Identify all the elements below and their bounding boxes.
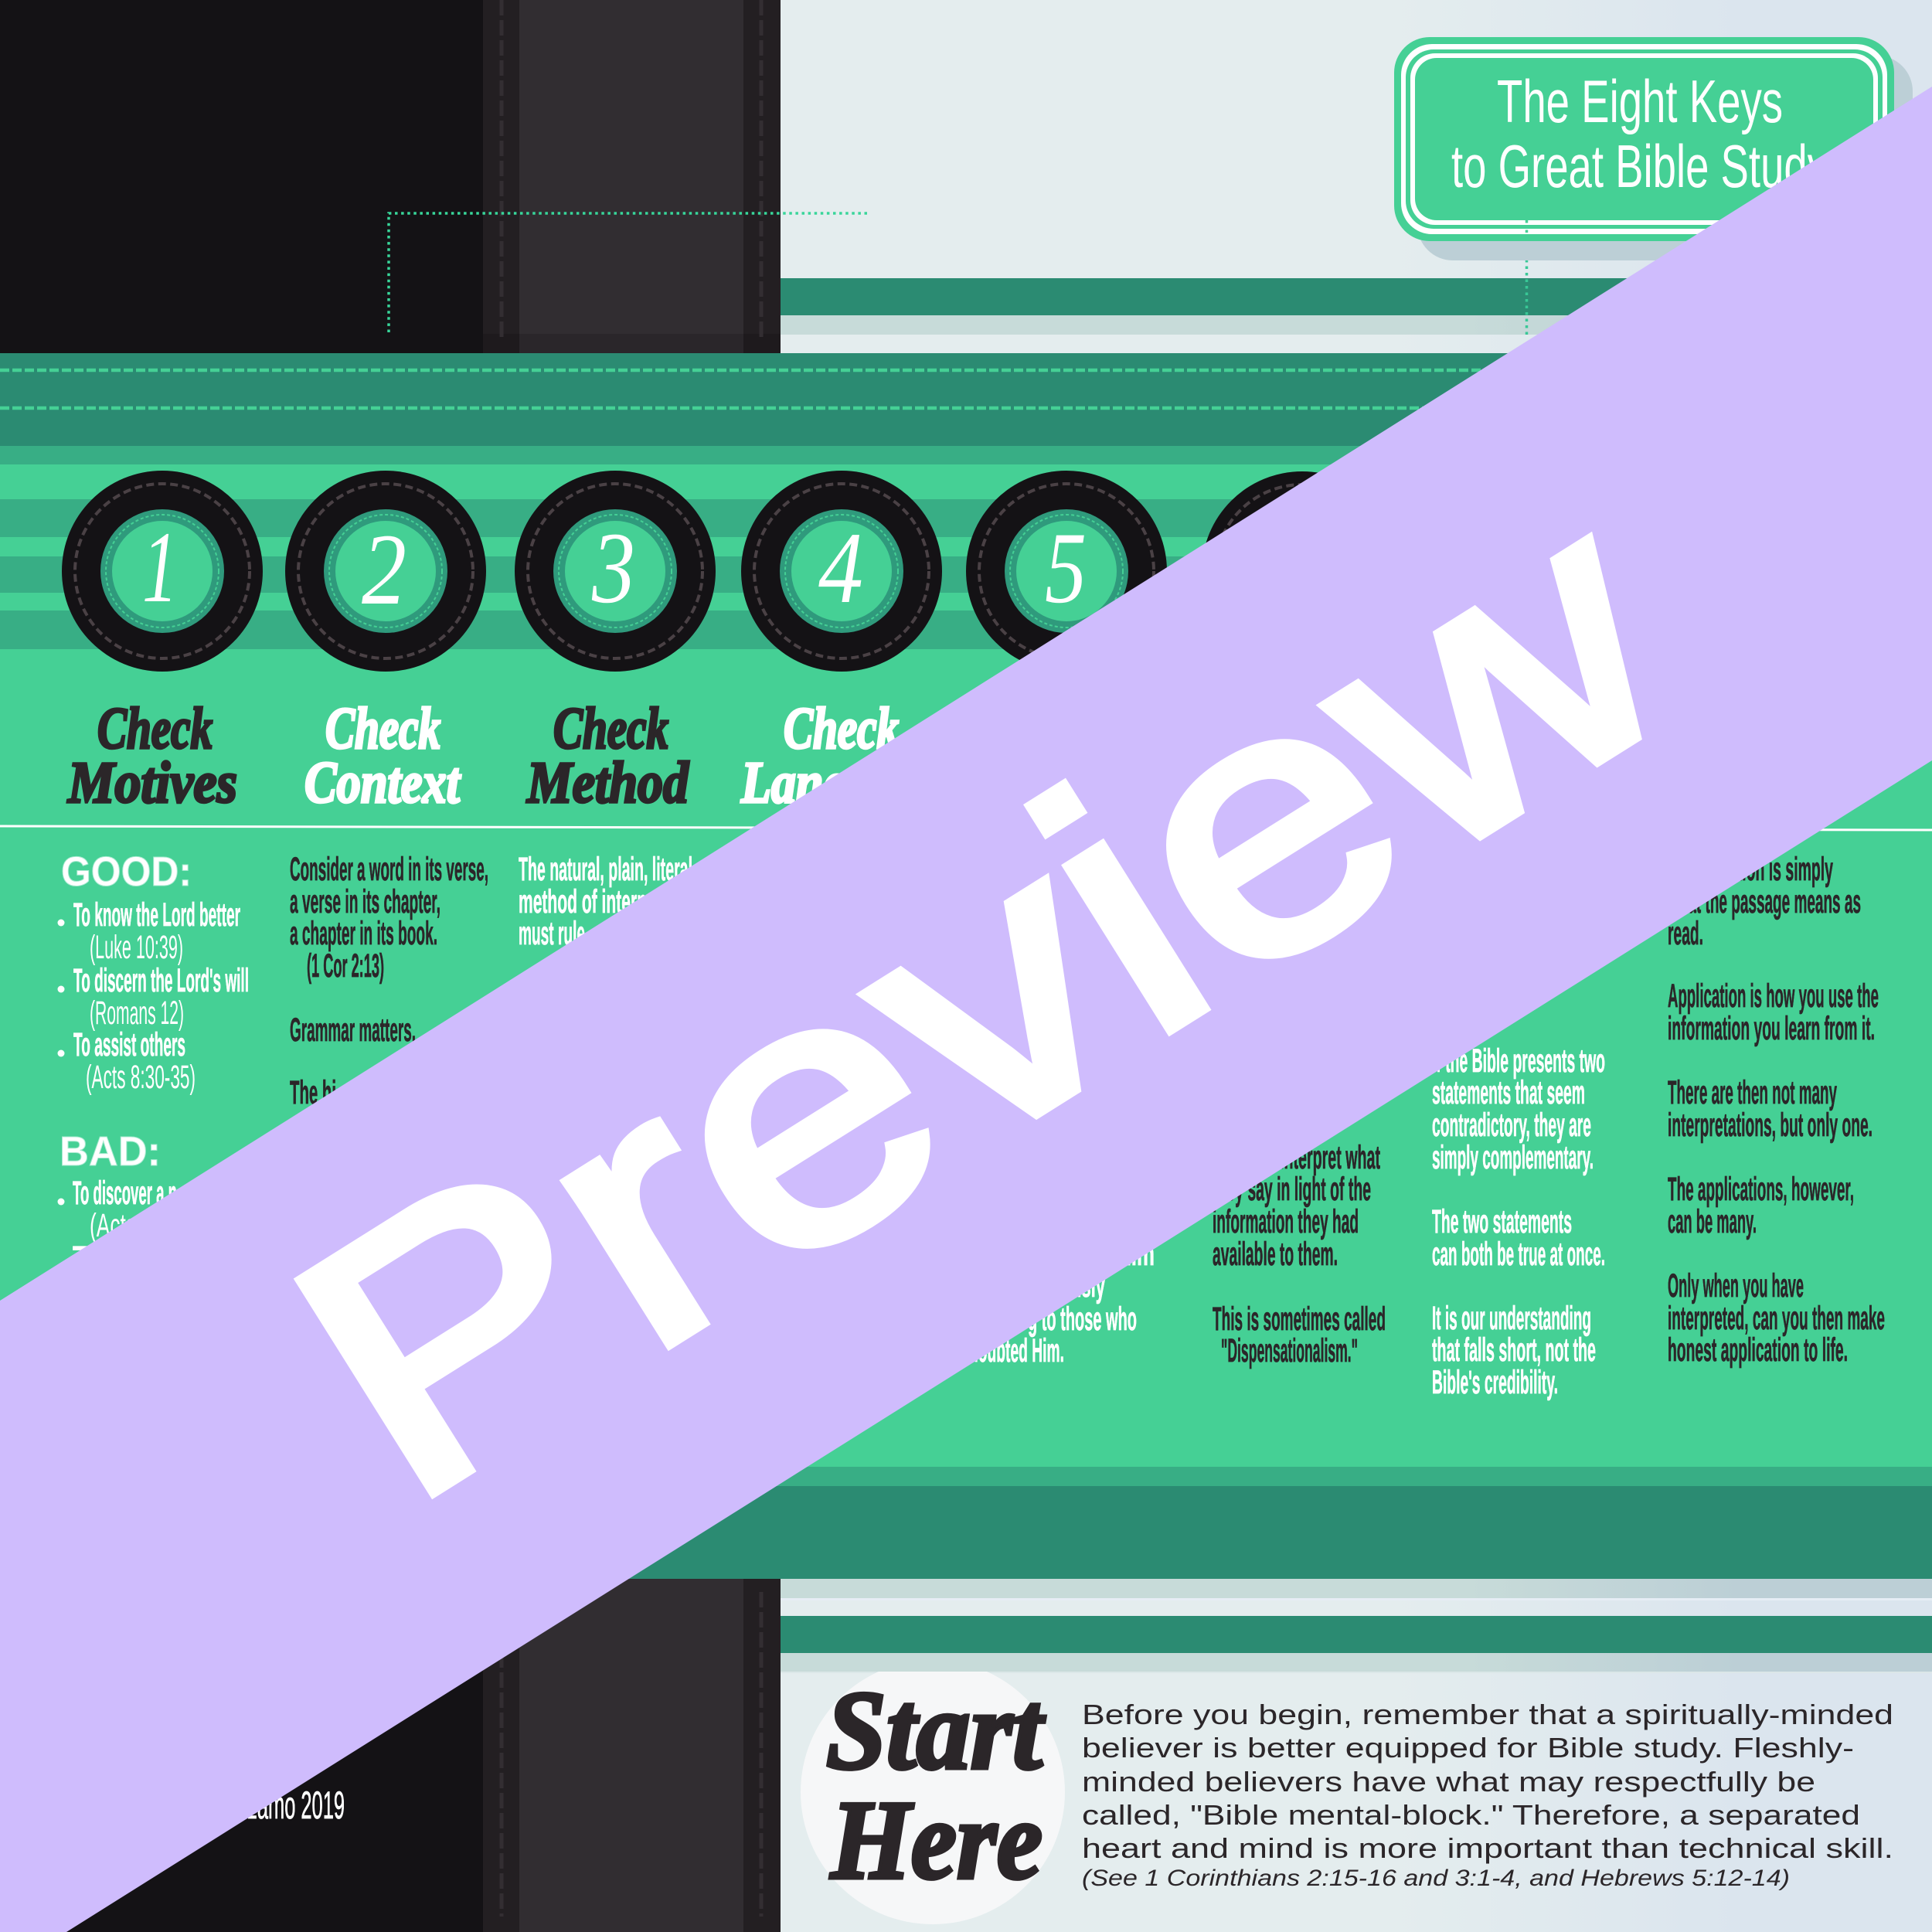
heading: check language: Language bbox=[740, 750, 947, 815]
good list: (Acts 8:30-35) bbox=[86, 1059, 196, 1096]
start here heading: Here bbox=[829, 1777, 1043, 1903]
bad list: T bbox=[73, 1240, 93, 1277]
infographic canvas: that falls short, not the bbox=[1432, 1332, 1596, 1369]
infographic canvas: This is sometimes called bbox=[1213, 1301, 1386, 1338]
start here paragraph: called, "Bible mental-block." Therefore, a separated bbox=[1082, 1799, 1860, 1831]
column 6 text bbox=[1213, 1139, 1386, 1369]
key 5 badge bbox=[966, 471, 1167, 672]
column 7 text: statements that seem bbox=[1432, 1074, 1585, 1111]
column 1: motives bbox=[57, 849, 249, 1277]
label: good: GOOD: bbox=[61, 849, 192, 895]
heading: check motives: Motives bbox=[67, 750, 237, 815]
infographic canvas: If the Bible presents two bbox=[1432, 1043, 1605, 1080]
key 2 badge: 2 bbox=[362, 512, 406, 626]
infographic canvas: interpret what bbox=[1280, 1139, 1380, 1176]
start here paragraph: minded believers have what may respectfully be bbox=[1082, 1766, 1815, 1798]
copyright text: nzamo 2019 bbox=[236, 1784, 345, 1827]
start here paragraph: believer is better equipped for Bible study. Fleshly- bbox=[1082, 1732, 1854, 1764]
column 2: context: a verse in its chapter, bbox=[290, 883, 440, 920]
column 5 fragments: him bbox=[1119, 1236, 1155, 1273]
heading: check method: Method bbox=[526, 750, 689, 815]
heading: check context bbox=[304, 696, 461, 815]
start here paragraph: heart and mind is more important than technical skill. bbox=[1082, 1832, 1893, 1864]
heading: check context: Check bbox=[325, 696, 440, 761]
column 6 text: available to them. bbox=[1213, 1236, 1338, 1273]
column 5 fragments: usly bbox=[1071, 1267, 1105, 1304]
infographic canvas: Consider a word in its verse, bbox=[290, 851, 488, 888]
column 3: method: must rule bbox=[519, 915, 585, 952]
scripture reference: (See 1 Corinthians 2:15-16 and 3:1-4, and Hebrews 5:12-14) bbox=[1082, 1866, 1790, 1891]
key 5 badge: 5 bbox=[1045, 511, 1087, 624]
preview word: Preview bbox=[230, 423, 1734, 1576]
column 7 text: The two statements bbox=[1432, 1203, 1572, 1240]
panel: dark strap bottom bbox=[0, 1579, 781, 1932]
infographic canvas: simply complementary. bbox=[1432, 1139, 1594, 1176]
infographic canvas: To know the Lord better bbox=[73, 896, 240, 934]
start here heading: Start bbox=[826, 1668, 1046, 1793]
column 2: context: Grammar matters. bbox=[290, 1012, 416, 1049]
key 6 badge bbox=[1202, 471, 1403, 672]
infographic canvas: "Dispensationalism." bbox=[1221, 1332, 1358, 1369]
infographic canvas: It is our understanding bbox=[1432, 1300, 1591, 1337]
column 2: context bbox=[290, 851, 488, 1111]
infographic canvas: can both be true at once. bbox=[1432, 1236, 1605, 1273]
start here heading bbox=[826, 1668, 1046, 1903]
heading: check language: Check bbox=[784, 696, 899, 761]
key 3 badge bbox=[515, 471, 716, 672]
good list bbox=[57, 896, 249, 1096]
start here circle bbox=[801, 1660, 1065, 1924]
heading: check method: Check bbox=[553, 696, 668, 761]
key 4 badge bbox=[741, 471, 942, 672]
heading: check method bbox=[526, 696, 689, 815]
bad list: (Acts bbox=[90, 1207, 136, 1244]
column 5 fragments: g to those who bbox=[1028, 1301, 1137, 1338]
column 2: context: (1 Cor 2:13) bbox=[307, 947, 384, 985]
panel: dark strap top bbox=[0, 0, 781, 353]
heading: check motives bbox=[67, 696, 237, 815]
heading: check context: Context bbox=[304, 750, 461, 815]
band over circle bbox=[781, 1616, 1932, 1672]
column 3: method bbox=[519, 851, 692, 952]
key 2 badge bbox=[285, 471, 486, 672]
key 1 badge bbox=[62, 471, 263, 672]
column 8 text bbox=[1668, 851, 1885, 1369]
column 8 text: can be many. bbox=[1668, 1203, 1757, 1240]
infographic canvas: The natural, plain, literal bbox=[519, 851, 692, 888]
title text line 1: The Eight Keys bbox=[1497, 67, 1783, 135]
good list: To assist others bbox=[73, 1026, 185, 1063]
infographic canvas: To discern the Lord's will bbox=[73, 962, 249, 999]
dotted connector: right bbox=[1526, 220, 1528, 335]
dotted connector: left bbox=[389, 213, 869, 332]
bad list bbox=[57, 1175, 177, 1277]
column 5 fragments: doubted Him. bbox=[969, 1332, 1064, 1369]
column 7 text bbox=[1432, 1043, 1605, 1401]
start here paragraph: Before you begin, remember that a spiritually-minded bbox=[1082, 1699, 1893, 1730]
column 6 text: information they had bbox=[1213, 1203, 1359, 1240]
infographic canvas: contradictory, they are bbox=[1432, 1107, 1591, 1144]
panel: green strap bbox=[0, 353, 1932, 1579]
good list: (Romans 12) bbox=[90, 995, 184, 1032]
column 8 text: read. bbox=[1668, 915, 1703, 952]
start here paragraph bbox=[1082, 1699, 1893, 1891]
title box bbox=[1394, 37, 1913, 260]
key 3 badge: 3 bbox=[591, 511, 635, 624]
top right stripes bbox=[781, 278, 1932, 335]
bottom right stripes bbox=[781, 1579, 1932, 1673]
infographic canvas: they say in light of the bbox=[1213, 1171, 1371, 1208]
key 4 badge: 4 bbox=[818, 511, 863, 624]
column 5 fragments bbox=[969, 1236, 1155, 1369]
column 3: method: method of interp bbox=[519, 883, 647, 920]
column 1: motives: To discover a n bbox=[73, 1175, 177, 1212]
label: bad: BAD: bbox=[60, 1128, 161, 1175]
good list: (Luke 10:39) bbox=[90, 929, 183, 966]
label: bad: BAD: bbox=[60, 1128, 161, 1175]
column 2: context: The hi bbox=[290, 1074, 336, 1111]
column 2: context: a chapter in its book. bbox=[290, 915, 437, 952]
column 7 text: Bible's credibility. bbox=[1432, 1364, 1558, 1401]
label: good: GOOD: bbox=[61, 849, 192, 895]
key 1 badge: 1 bbox=[142, 510, 178, 624]
heading: check language bbox=[740, 696, 947, 815]
heading: check motives: Check bbox=[97, 696, 213, 761]
